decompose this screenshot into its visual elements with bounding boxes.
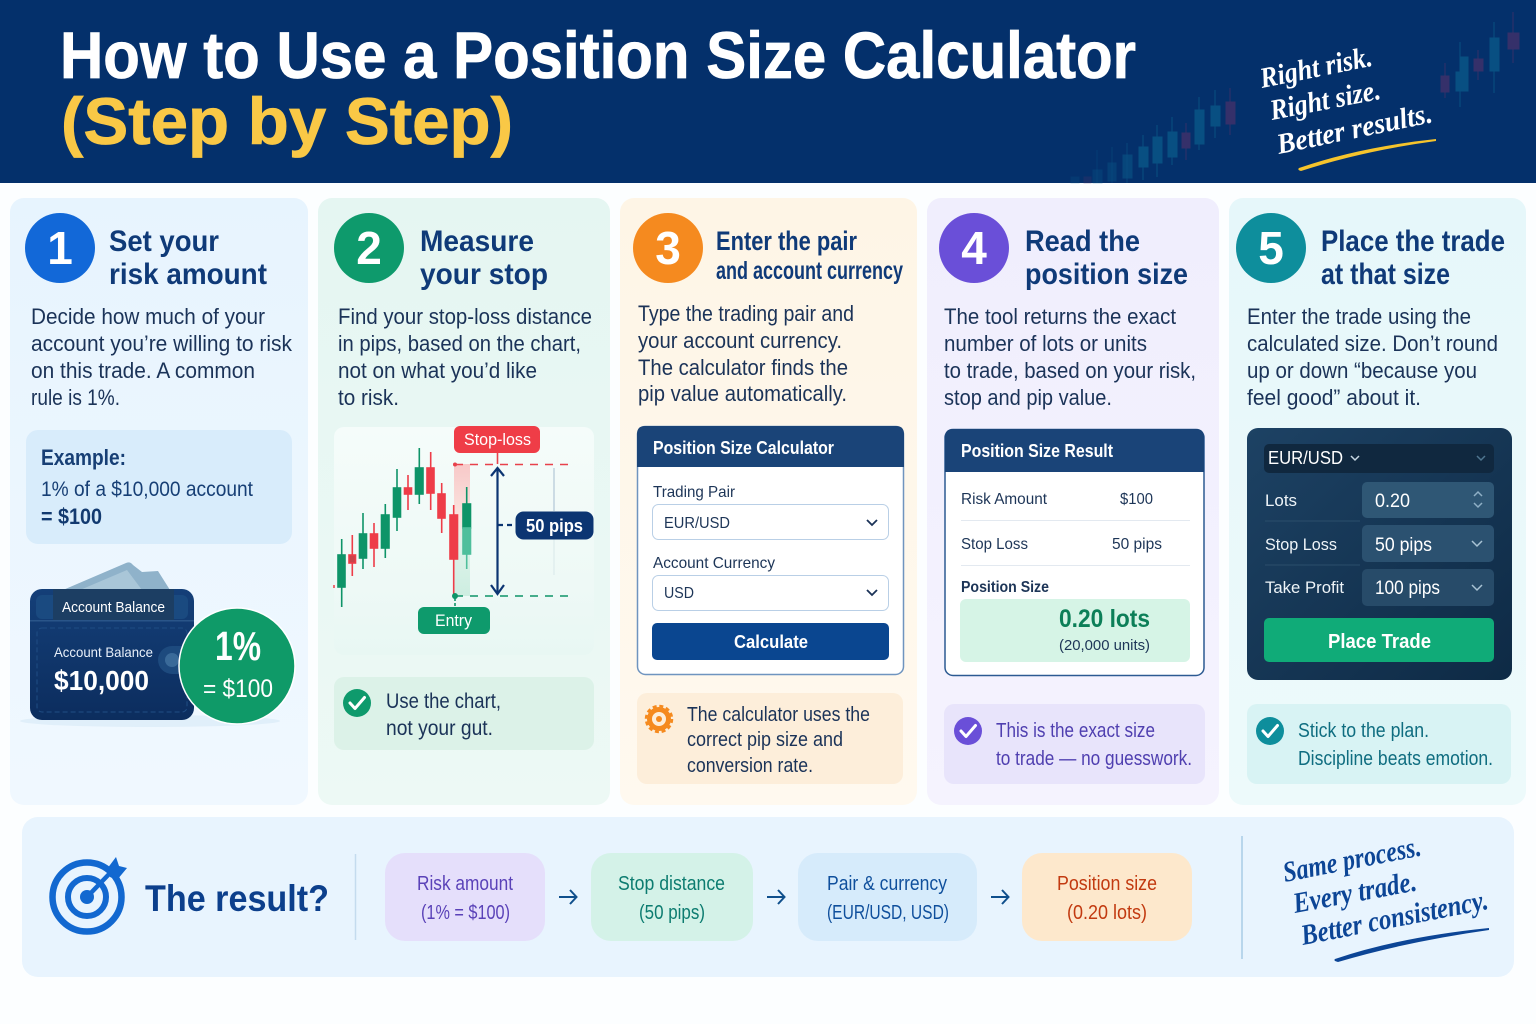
heading — [1321, 225, 1505, 291]
callout: use the chart — [334, 677, 594, 750]
body text: Type the trading pair and — [638, 301, 854, 326]
step number 4 — [939, 213, 1009, 283]
flow pill: pair and currency — [798, 853, 977, 941]
step number 1 — [25, 213, 95, 283]
flow pill: pair and currency: Pair & currency — [827, 873, 947, 895]
callout: pip size and conversion — [637, 693, 903, 784]
flow pill: stop distance: (50 pips) — [639, 902, 705, 924]
body text — [31, 304, 293, 410]
heading: Place the trade — [1321, 225, 1505, 258]
trade ticket: 50 pips — [1375, 535, 1432, 556]
step number 2 — [334, 213, 404, 283]
body text — [638, 301, 854, 406]
callout: stick to the plan: Discipline beats emotion. — [1298, 748, 1493, 770]
calculator card: Account Currency — [653, 555, 775, 572]
panel: step 3 enter the pair — [620, 198, 917, 805]
heading: Measure — [420, 225, 534, 258]
flow pill: pair and currency: (EUR/USD, USD) — [827, 902, 949, 924]
trade ticket: 100 pips — [1375, 578, 1440, 599]
trade ticket — [1247, 428, 1512, 680]
callout: use the chart: not your gut. — [386, 717, 493, 740]
body text: The calculator finds the — [638, 355, 848, 380]
flow pill: position size: Position size — [1057, 873, 1157, 895]
icon: wallet — [20, 562, 280, 727]
trade ticket: Lots — [1265, 491, 1297, 510]
body text: rule is 1%. — [31, 385, 120, 410]
panel: step 1 set your risk amount — [10, 198, 308, 805]
result card: (20,000 units) — [1059, 637, 1150, 654]
flow pill: stop distance — [591, 853, 753, 941]
example box: = $100 — [41, 504, 102, 529]
step number 1: 1 — [47, 222, 73, 274]
callout: exact size: to trade — no guesswork. — [996, 748, 1192, 770]
body text — [1247, 304, 1498, 410]
body text: Decide how much of your — [31, 304, 265, 329]
body text: number of lots or units — [944, 331, 1147, 356]
heading: your stop — [420, 258, 548, 291]
candlestick chart — [334, 427, 594, 655]
heading: risk amount — [109, 258, 267, 291]
label: stop-loss: Stop-loss — [464, 430, 531, 449]
body text: to risk. — [338, 385, 399, 410]
step number 5 — [1236, 213, 1306, 283]
heading: the result: The result? — [145, 878, 329, 919]
panel: step 4 read the position size — [927, 198, 1219, 805]
step number 2: 2 — [356, 222, 382, 274]
result card: 50 pips — [1112, 536, 1162, 553]
closing handwritten note: Same process. — [1280, 831, 1424, 889]
step number 4: 4 — [961, 222, 987, 274]
badge: 1% = $100: 1% — [215, 623, 261, 669]
heading: Enter the pair — [716, 226, 857, 256]
result card: Risk Amount — [961, 491, 1048, 508]
result card: $100 — [1120, 491, 1153, 508]
flow pill: risk amount: (1% = $100) — [421, 902, 510, 924]
body text — [338, 304, 592, 410]
body text: in pips, based on the chart, — [338, 331, 581, 356]
body text: to trade, based on your risk, — [944, 358, 1196, 383]
callout: stick to the plan — [1247, 704, 1511, 784]
heading — [109, 225, 267, 291]
example box — [26, 430, 292, 544]
result card: 0.20 lots — [1059, 605, 1150, 633]
heading — [716, 226, 903, 285]
calculator card: USD — [664, 585, 694, 602]
closing handwritten note — [1280, 831, 1491, 962]
heading: at that size — [1321, 258, 1450, 291]
closing handwritten note: Better consistency. — [1297, 884, 1491, 952]
callout: exact size — [944, 704, 1205, 784]
callout: exact size: This is the exact size — [996, 720, 1155, 742]
arrow: 50 pip distance — [491, 468, 516, 594]
step number 3: 3 — [655, 222, 681, 274]
flow pill: risk amount: Risk amount — [417, 873, 513, 895]
label: 50 pips — [516, 512, 594, 540]
decorative candlestick backdrop — [1071, 12, 1519, 183]
heading — [1025, 225, 1188, 291]
body text: calculated size. Don’t round — [1247, 331, 1498, 356]
callout: pip size and conversion: The calculator uses the — [687, 704, 870, 726]
calculator card: Calculate — [734, 632, 808, 652]
panel: step 2 measure your stop — [318, 198, 610, 805]
closing handwritten note: Every trade. — [1290, 866, 1419, 920]
label: entry: Entry — [435, 611, 472, 630]
heading: position size — [1025, 258, 1188, 291]
trade ticket: 0.20 — [1375, 491, 1410, 512]
body text: pip value automatically. — [638, 381, 847, 406]
body text: not on what you’d like — [338, 358, 537, 383]
heading: and account currency — [716, 257, 903, 285]
body text: account you’re willing to risk — [31, 331, 293, 356]
callout: pip size and conversion: correct pip size and — [687, 729, 843, 751]
label: 50 pips: 50 pips — [526, 516, 583, 536]
body text — [944, 304, 1196, 410]
body text: up or down “because you — [1247, 358, 1477, 383]
arrow — [559, 890, 576, 904]
callout: use the chart: Use the chart, — [386, 690, 501, 713]
calculator card — [637, 426, 904, 674]
icon: wallet: Account Balance — [62, 599, 165, 616]
flow pill: position size — [1022, 853, 1192, 941]
body text: stop and pip value. — [944, 385, 1112, 410]
flow pill: risk amount — [385, 853, 545, 941]
icon: wallet: $10,000 — [54, 665, 149, 696]
tagline — [1256, 41, 1436, 171]
calculator card: Trading Pair — [653, 484, 736, 501]
heading: Set your — [109, 225, 219, 258]
example box: 1% of a $10,000 account — [41, 478, 253, 501]
title: How to Use a Position Size Calculator — [60, 18, 1136, 92]
panel: step 5 place the trade — [1229, 198, 1526, 805]
panel: the result — [22, 817, 1514, 977]
callout: pip size and conversion: conversion rate. — [687, 755, 813, 777]
tagline: Right risk. — [1256, 41, 1375, 95]
body text: feel good” about it. — [1247, 385, 1421, 410]
tagline: Better results. — [1273, 97, 1435, 161]
body text: The tool returns the exact — [944, 304, 1176, 329]
icon: wallet: Account Balance — [54, 644, 153, 660]
icon: target with arrow — [52, 857, 127, 932]
badge: 1% = $100 — [179, 608, 295, 724]
header banner — [0, 0, 1536, 183]
arrow — [767, 890, 784, 904]
result card: Position Size Result — [961, 441, 1113, 461]
tagline: Right size. — [1266, 74, 1383, 127]
body text: Enter the trade using the — [1247, 304, 1471, 329]
title — [60, 18, 1136, 158]
result card: Stop Loss — [961, 536, 1028, 553]
calculator card: EUR/USD — [664, 515, 730, 532]
arrow — [991, 890, 1008, 904]
title: (Step by Step) — [61, 84, 513, 158]
badge: 1% = $100: = $100 — [203, 675, 273, 703]
step number 5: 5 — [1258, 222, 1284, 274]
heading: Read the — [1025, 225, 1140, 258]
body text: Find your stop-loss distance — [338, 304, 592, 329]
trade ticket: Take Profit — [1265, 578, 1344, 597]
trade ticket: Stop Loss — [1265, 535, 1337, 554]
trade ticket: Place Trade — [1328, 631, 1431, 653]
example box: Example: — [41, 445, 126, 470]
body text: on this trade. A common — [31, 358, 255, 383]
label: stop-loss — [454, 426, 540, 453]
label: entry — [418, 607, 490, 634]
trade ticket: EUR/USD — [1268, 448, 1343, 468]
step number 3 — [633, 213, 703, 283]
heading — [420, 225, 548, 291]
flow pill: stop distance: Stop distance — [618, 873, 725, 895]
calculator card: Position Size Calculator — [653, 438, 834, 458]
result card — [945, 429, 1204, 676]
flow pill: position size: (0.20 lots) — [1067, 902, 1147, 924]
callout: stick to the plan: Stick to the plan. — [1298, 720, 1429, 742]
body text: your account currency. — [638, 328, 842, 353]
result card: Position Size — [961, 579, 1049, 596]
